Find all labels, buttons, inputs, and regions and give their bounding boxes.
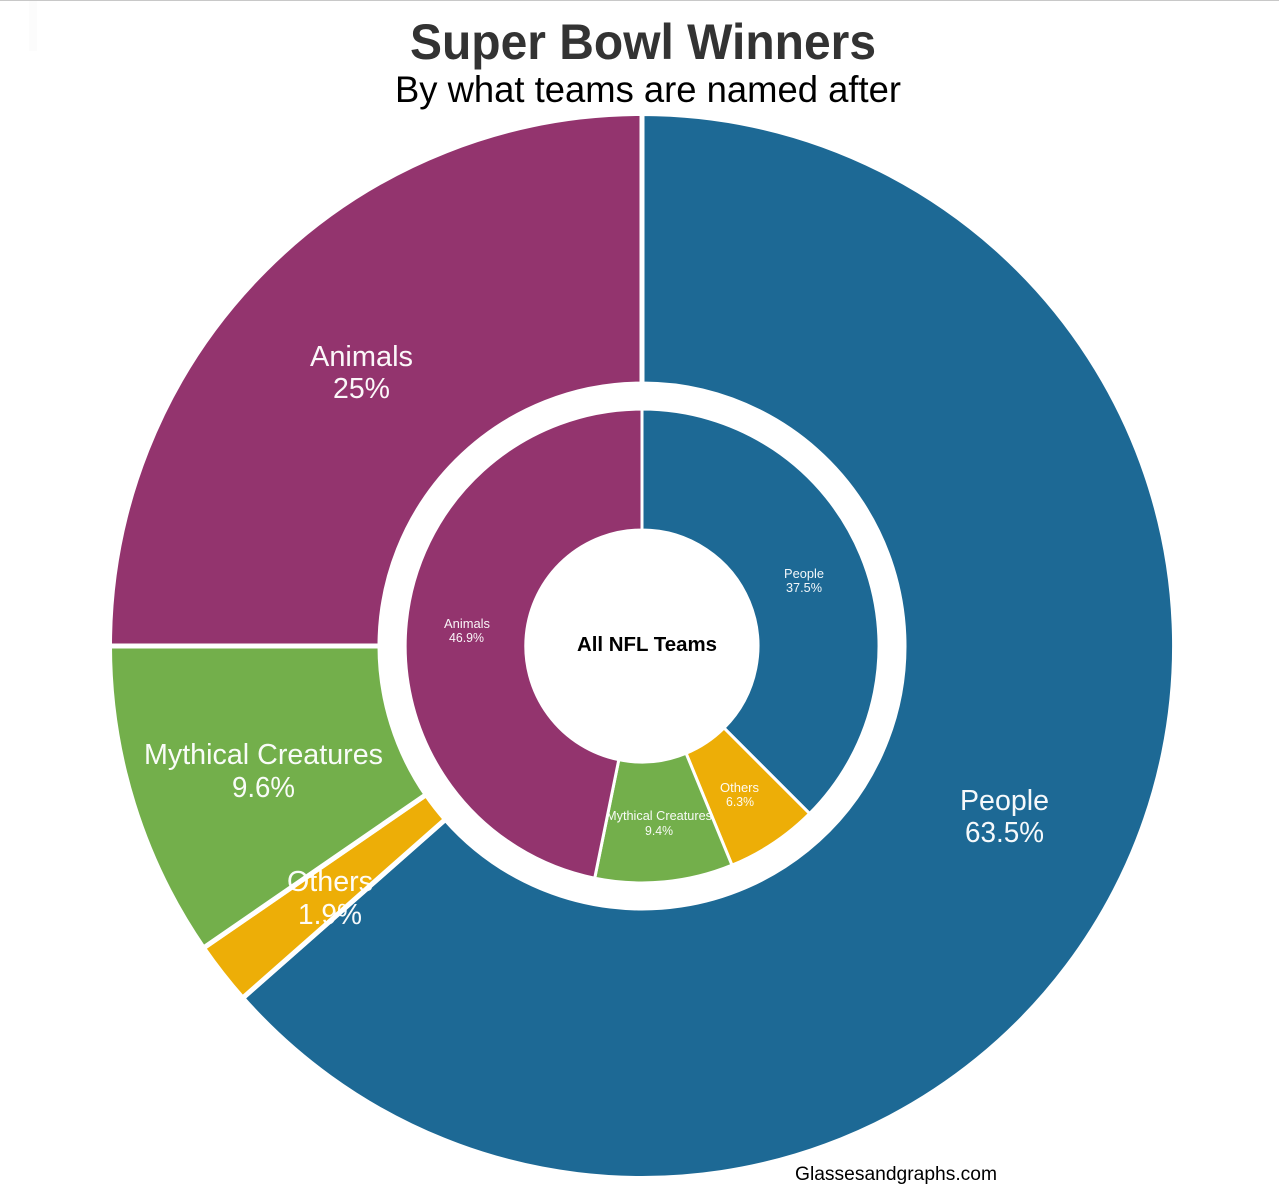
inner slice: Animals bbox=[405, 409, 642, 878]
label: inner Mythical Creatures 9.4%: Mythical Creatures bbox=[606, 808, 712, 823]
label: inner Others 6.3%: Others bbox=[720, 780, 759, 795]
outer labels bbox=[144, 341, 1049, 931]
label: inner Others 6.3% bbox=[720, 780, 759, 809]
label: Others 1.9%: 1.9% bbox=[298, 899, 362, 931]
outer slice: Mythical Creatures bbox=[110, 646, 426, 948]
source credit: Glassesandgraphs.com bbox=[795, 1164, 997, 1185]
label: inner Animals 46.9% bbox=[444, 616, 490, 645]
label: inner Others 6.3%: 6.3% bbox=[726, 794, 754, 809]
outer slice: Animals bbox=[110, 114, 642, 646]
label: Mythical Creatures 9.6% bbox=[144, 739, 383, 804]
inner slice: Others bbox=[686, 728, 810, 865]
label: inner Animals 46.9%: 46.9% bbox=[449, 630, 484, 645]
outer slice: People bbox=[243, 114, 1175, 1178]
label: inner People 37.5%: People bbox=[784, 566, 824, 581]
label: Mythical Creatures 9.6%: 9.6% bbox=[232, 772, 295, 804]
outer slice: Others bbox=[203, 795, 446, 998]
label: inner People 37.5% bbox=[784, 566, 824, 595]
label: Others 1.9%: Others bbox=[287, 866, 373, 898]
label: inner Mythical Creatures 9.4% bbox=[606, 808, 712, 838]
inner donut chart: all NFL teams bbox=[405, 409, 879, 883]
label: Others 1.9% bbox=[287, 866, 373, 931]
label: inner Animals 46.9%: Animals bbox=[444, 616, 490, 631]
label: People 63.5% bbox=[960, 785, 1049, 849]
label: Animals 25% bbox=[310, 341, 413, 405]
outer donut chart: Super Bowl winners bbox=[110, 114, 1175, 1178]
label: inner People 37.5%: 37.5% bbox=[786, 580, 822, 595]
subtitle: By what teams are named after bbox=[395, 69, 901, 110]
center label: All NFL Teams bbox=[577, 634, 717, 656]
label: People 63.5%: People bbox=[960, 785, 1049, 817]
inner slice: People bbox=[642, 409, 879, 814]
label: Animals 25%: Animals bbox=[310, 341, 413, 373]
inner slice: Mythical Creatures bbox=[595, 753, 732, 883]
title: Super Bowl Winners bbox=[410, 14, 876, 70]
label: inner Mythical Creatures 9.4%: 9.4% bbox=[645, 823, 673, 838]
label: Mythical Creatures 9.6%: Mythical Creatures bbox=[144, 739, 383, 771]
label: Animals 25%: 25% bbox=[333, 373, 390, 405]
label: People 63.5%: 63.5% bbox=[965, 817, 1044, 849]
inner labels bbox=[444, 566, 824, 838]
